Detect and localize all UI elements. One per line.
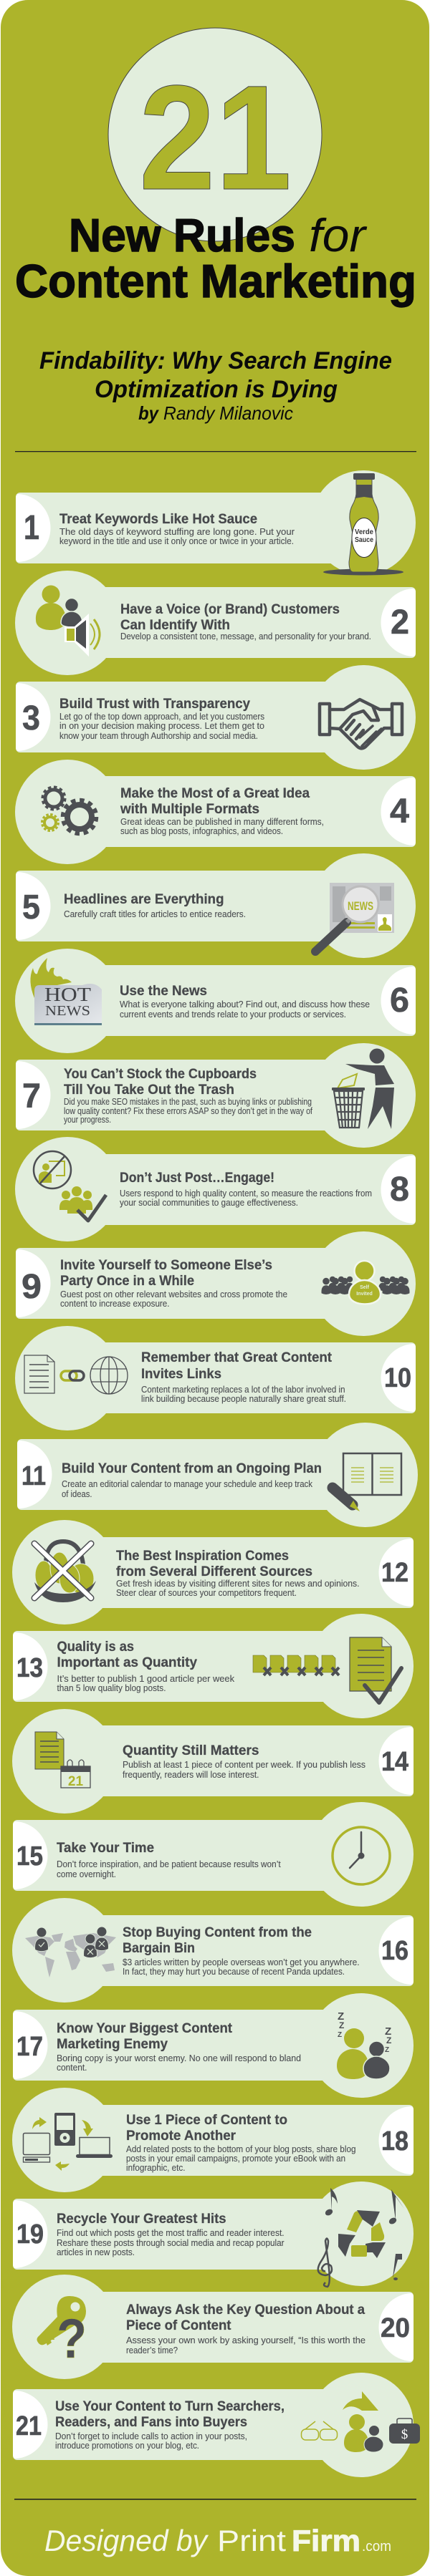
icon: self invited person with crowd: Self: [360, 1285, 370, 1290]
rule 4 text: Great ideas can be published in many different forms,: [120, 816, 324, 827]
rule 18 text: infographic, etc.: [126, 2162, 185, 2173]
footer credit: [44, 2524, 391, 2557]
rule 4 text: [120, 816, 324, 836]
panel shape: [13, 1802, 414, 1907]
rule 10 heading: [141, 1350, 332, 1382]
rule 21 heading: [55, 2398, 285, 2430]
icon: big document with check: [350, 1637, 401, 1703]
rule 1 text: The old days of keyword stuffing are long gone. Put your: [59, 526, 295, 537]
icon: newspaper and magnifier: NEWS: [348, 899, 373, 913]
panel shape: [12, 1898, 414, 2003]
rule 5 heading: Headlines are Everything: [64, 891, 224, 907]
rule 7 text: [64, 1096, 312, 1125]
rule 19 heading: Recycle Your Greatest Hits: [57, 2211, 226, 2227]
rule 3 panel: [16, 665, 416, 770]
footer credit: Firm: [292, 2524, 360, 2557]
rule 2 panel: [15, 571, 416, 675]
rule 10 heading: Invites Links: [141, 1366, 221, 1382]
rule 13 text: than 5 low quality blog posts.: [57, 1682, 166, 1693]
number 21: 21: [16, 2411, 42, 2441]
rule 8 heading: Don’t Just Post…Engage!: [120, 1170, 274, 1186]
icon: money bag: $: [401, 2427, 408, 2442]
icon: glasses: [301, 2421, 337, 2440]
rule 3 text: Let go of the top down approach, and let you customers: [59, 711, 264, 722]
rule 16 heading: Bargain Bin: [123, 1940, 195, 1956]
number 13: 13: [16, 1653, 43, 1683]
number 7: 7: [22, 1078, 41, 1115]
number 4: 4: [390, 793, 409, 831]
rule 16 text: $3 articles written by people overseas won’t get you anywhere.: [123, 1957, 360, 1967]
rule 7 text: your progress.: [64, 1114, 111, 1125]
main title: New Rules: [69, 209, 295, 261]
panel shape: [16, 1231, 416, 1336]
rule 9 text: content to increase exposure.: [60, 1298, 169, 1309]
subtitle: Findability: Why Search Engine: [39, 347, 392, 374]
rule 7 text: low quality content? Fix these errors ASAP so they don’t get in the way of: [64, 1105, 312, 1116]
panel shape: [13, 2182, 414, 2286]
number 19: 19: [16, 2219, 44, 2250]
panel shape: [15, 1326, 416, 1430]
panel shape: [15, 1137, 416, 1241]
big circle badge with 21: [108, 28, 322, 241]
rule 16 heading: Stop Buying Content from the: [123, 1924, 312, 1940]
rule 12 panel: [12, 1520, 414, 1624]
rule 19 text: articles in new posts.: [57, 2247, 135, 2257]
icon: sleeping people: Z: [338, 2010, 344, 2023]
subtitle: Randy Milanovic: [163, 402, 293, 424]
rule 16 panel: [12, 1898, 414, 2003]
rule 4 panel: [15, 760, 416, 864]
panel shape: [13, 1614, 414, 1718]
rule 1 text: keyword in the title and use it only once or twice in your article.: [59, 536, 294, 546]
rule 19 panel: [13, 2182, 414, 2287]
rule 7 heading: Till You Take Out the Trash: [64, 1082, 234, 1098]
number 6: 6: [390, 982, 409, 1020]
rule 2 heading: Can Identify With: [120, 617, 230, 633]
number 9: 9: [22, 1268, 42, 1306]
rule 4 text: such as blog posts, infographics, and videos.: [120, 825, 283, 836]
rule 3 text: [59, 711, 264, 741]
rule 21 text: [55, 2431, 247, 2451]
number 12: 12: [381, 1558, 408, 1588]
rule 17 text: Boring copy is your worst enemy. No one will respond to bland: [57, 2053, 301, 2063]
icon: hot news: [30, 958, 102, 1025]
rule 13 text: [57, 1673, 234, 1693]
number 18: 18: [381, 2126, 408, 2156]
rule 16 heading: [123, 1924, 312, 1956]
rule 20 heading: Always Ask the Key Question About a: [126, 2302, 365, 2318]
rule 14 text: [123, 1759, 366, 1780]
rule 20 text: reader’s time?: [126, 2345, 178, 2355]
number 11: 11: [22, 1461, 46, 1491]
icon: newspaper and magnifier: [315, 883, 394, 952]
rule 6 heading: Use the News: [120, 983, 207, 999]
icon: sleeping people: Z: [338, 2031, 342, 2039]
main title: [15, 209, 416, 307]
rule 7 text: Did you make SEO mistakes in the past, such as buying links or publishing: [64, 1096, 312, 1107]
rule 12 text: Get fresh ideas by visiting different sites for news and opinions.: [116, 1578, 360, 1589]
icon: hot news: HOT: [44, 984, 92, 1005]
rule 9 text: Guest post on other relevant websites and cross promote the: [60, 1289, 287, 1299]
rule 20 text: [126, 2335, 366, 2355]
number 5: 5: [22, 888, 40, 926]
number 3: 3: [22, 699, 40, 737]
number 16: 16: [381, 1936, 408, 1966]
rule 12 heading: The Best Inspiration Comes: [116, 1548, 289, 1564]
rule 20 panel: [12, 2275, 414, 2379]
icon: key and question mark: [37, 2296, 87, 2370]
icon: document and calendar: [35, 1732, 90, 1789]
icon: clock: [333, 1827, 390, 1884]
icon: handshake: [320, 699, 402, 748]
icon: hot sauce bottle: [323, 473, 403, 576]
icon: sleeping people: Z: [339, 2020, 344, 2030]
rule 6 text: current events and trends relate to your products or services.: [120, 1009, 346, 1020]
icon: document, link and globe: [24, 1355, 128, 1394]
subtitle: [39, 347, 392, 424]
panel shape: [13, 1993, 414, 2098]
rule 6 text: [120, 999, 370, 1020]
rule 7 heading: You Can’t Stock the Cupboards: [64, 1066, 257, 1082]
rule 13 heading: [57, 1639, 197, 1670]
number 15: 15: [16, 1841, 43, 1872]
subtitle: Optimization is Dying: [95, 376, 338, 403]
icon: self invited person with crowd: Invited: [356, 1292, 373, 1297]
rule 18 heading: [126, 2112, 287, 2144]
header: [15, 28, 416, 424]
rule 20 heading: [126, 2302, 365, 2333]
rule 17 text: content.: [57, 2062, 87, 2073]
number 10: 10: [384, 1363, 411, 1393]
rule 20 text: Assess your own work by asking yourself, “Is this worth the: [126, 2335, 366, 2345]
number 17: 17: [16, 2032, 43, 2062]
rule 11 text: Create an editorial calendar to manage your schedule and keep track: [62, 1478, 312, 1489]
rule 13 heading: Quality is as: [57, 1639, 134, 1655]
rule 14 panel: [12, 1709, 414, 1814]
rule 2 text: Develop a consistent tone, message, and personality for your brand.: [120, 631, 371, 641]
icon: recycling symbol with music notes: [318, 2188, 404, 2287]
rule 6 text: What is everyone talking about? Find out, and discuss how these: [120, 999, 370, 1009]
rule 2 heading: [120, 601, 340, 633]
rule 21 panel: [13, 2373, 420, 2477]
rule 5 text: Carefully craft titles for articles to entice readers.: [64, 909, 246, 919]
icon: five bad documents: [253, 1655, 339, 1675]
icon: document and calendar: 21: [68, 1774, 83, 1789]
rule 18 panel: [12, 2088, 414, 2192]
panel shape: [15, 571, 416, 675]
rule 11 heading: Build Your Content from an Ongoing Plan: [62, 1461, 322, 1476]
icon: money bag: [389, 2418, 420, 2444]
rule 20 heading: Piece of Content: [126, 2318, 231, 2333]
rule 8 text: your social communities to gauge effectiveness.: [120, 1197, 298, 1208]
rule 12 heading: [116, 1548, 312, 1579]
rule 15 text: come overnight.: [57, 1869, 116, 1879]
icon: key and question mark: ?: [57, 2307, 87, 2370]
panel shape: [16, 470, 416, 575]
rule 21 heading: Use Your Content to Turn Searchers,: [55, 2398, 285, 2414]
number 1: 1: [24, 509, 39, 547]
rule 14 text: Publish at least 1 piece of content per week. If you publish less: [123, 1759, 366, 1770]
rule 8 text: Users respond to high quality content, so measure the reactions from: [120, 1188, 372, 1199]
panel shape: [13, 2373, 414, 2477]
main title: for: [309, 209, 367, 261]
number 20: 20: [381, 2313, 410, 2343]
rule 8 text: [120, 1188, 372, 1208]
rule 12 text: [116, 1578, 360, 1598]
rule 10 text: Content marketing replaces a lot of the labor involved in: [141, 1384, 345, 1395]
number 2: 2: [391, 604, 409, 641]
rule 9 heading: Invite Yourself to Someone Else’s: [60, 1257, 272, 1273]
icon: sleeping people: Z: [385, 2046, 389, 2054]
rule 3 heading: Build Trust with Transparency: [59, 696, 250, 712]
icon: crossed out egg basket: [34, 1541, 96, 1602]
rule 10 heading: Remember that Great Content: [141, 1350, 332, 1365]
rule 8 panel: [15, 1137, 416, 1241]
rule 12 text: Steer clear of sources your competitors frequent.: [116, 1587, 297, 1598]
rule 9 text: [60, 1289, 287, 1309]
icon: hot sauce bottle: Verde: [355, 528, 373, 536]
icon: people with check mark: [59, 1186, 106, 1221]
number 8: 8: [390, 1171, 409, 1209]
icon: gears: [42, 788, 96, 833]
rule 11 text: of ideas.: [62, 1488, 92, 1499]
panel shape: [15, 949, 416, 1053]
footer credit: Designed by: [44, 2524, 209, 2557]
rule 21 text: introduce promotions on your blog, etc.: [55, 2440, 199, 2451]
icon: person throwing trash: [332, 1048, 394, 1129]
rule 14 text: frequently, readers will lose interest.: [123, 1769, 259, 1780]
subtitle: by: [138, 402, 159, 424]
rule 17 heading: [57, 2020, 232, 2052]
rule 15 panel: [13, 1802, 414, 1907]
panel shape: [17, 1423, 418, 1527]
panel shape: [12, 1709, 414, 1814]
rule 6 panel: [15, 949, 416, 1053]
rule 19 text: Find out which posts get the most traffic and reader interest.: [57, 2227, 285, 2238]
rule 16 text: In fact, they may hurt you because of recent Panda updates.: [123, 1966, 345, 1977]
rule 21 heading: Readers, and Fans into Buyers: [55, 2414, 247, 2430]
rule 9 heading: Party Once in a While: [60, 1273, 194, 1289]
rule 11 panel: [17, 1423, 418, 1527]
rule 21 text: Don’t forget to include calls to action in your posts,: [55, 2431, 247, 2441]
icon: no posting sign: [34, 1151, 71, 1188]
rule 3 text: in on your decision making process. Let them get to: [59, 720, 264, 731]
rule 15 text: [57, 1859, 281, 1879]
rule 4 heading: Make the Most of a Great Idea: [120, 785, 310, 801]
rule 13 text: It’s better to publish 1 good article per week: [57, 1673, 234, 1684]
rule 16 text: [123, 1957, 360, 1977]
panel shape: [12, 2275, 414, 2379]
panel shape: [12, 1520, 414, 1624]
rule 1 heading: Treat Keywords Like Hot Sauce: [59, 511, 257, 527]
rule 19 text: [57, 2227, 285, 2257]
rule 7 panel: [16, 1043, 416, 1148]
icon: sleeping people: [337, 2010, 391, 2079]
rule 15 heading: Take Your Time: [57, 1840, 154, 1856]
rule 14 heading: Quantity Still Matters: [123, 1743, 259, 1758]
rule 12 heading: from Several Different Sources: [116, 1564, 312, 1579]
rule 2 heading: Have a Voice (or Brand) Customers: [120, 601, 340, 617]
rule 3 text: know your team through Authorship and social media.: [59, 730, 258, 741]
rule 17 heading: Know Your Biggest Content: [57, 2020, 232, 2036]
rule 13 heading: Important as Quantity: [57, 1655, 197, 1670]
panel shape: [16, 665, 416, 770]
rule 15 text: Don’t force inspiration, and be patient because results won’t: [57, 1859, 281, 1869]
rule 17 text: [57, 2053, 301, 2073]
rule 9 heading: [60, 1257, 272, 1289]
icon: sleeping people: Z: [385, 2025, 391, 2038]
panel shape: [15, 760, 416, 864]
panel shape: [12, 2088, 414, 2192]
rule 4 heading: with Multiple Formats: [120, 801, 259, 817]
rule 1 text: [59, 526, 295, 546]
main title: Content Marketing: [15, 255, 416, 307]
rule 7 heading: [64, 1066, 257, 1098]
rule 10 text: link building because people naturally share great stuff.: [141, 1393, 346, 1404]
rule 18 text: posts in your email campaigns, promote your eBook with an: [126, 2153, 345, 2164]
rule 1 panel: [16, 470, 416, 576]
rule 11 text: [62, 1478, 312, 1499]
rule 10 text: [141, 1384, 346, 1404]
panel shape: [16, 853, 416, 958]
rule 5 panel: [16, 853, 416, 958]
icon: notebook and pen: [333, 1453, 401, 1511]
icon: voice people and speaker: [36, 586, 100, 657]
icon: self invited person with crowd: [321, 1261, 410, 1304]
number 14: 14: [381, 1747, 408, 1777]
big circle badge with 21: 21: [139, 55, 292, 221]
icon: arrow: [343, 2391, 378, 2411]
rule 18 heading: Promote Another: [126, 2128, 236, 2144]
rule 13 panel: [13, 1614, 414, 1718]
icon: world map with people: [25, 1927, 116, 1977]
icon: hot sauce bottle: Sauce: [355, 536, 373, 544]
rule 10 panel: [15, 1326, 416, 1430]
footer credit: Print: [217, 2524, 286, 2557]
footer credit: .com: [362, 2539, 391, 2555]
panel shape: [16, 1043, 416, 1148]
rule 17 panel: [13, 1993, 414, 2098]
rule 4 heading: [120, 785, 310, 817]
rule 17 heading: Marketing Enemy: [57, 2036, 168, 2052]
rule 18 heading: Use 1 Piece of Content to: [126, 2112, 287, 2128]
rule 19 text: Reshare these posts through social media and recap popular: [57, 2237, 285, 2248]
icon: devices sharing content: [23, 2113, 113, 2171]
rule 9 panel: [16, 1231, 416, 1336]
rule 18 text: [126, 2144, 355, 2173]
icon: hot news: NEWS: [45, 1003, 90, 1019]
rule 18 text: Add related posts to the bottom of your blog posts, share blog: [126, 2144, 355, 2154]
icon: sleeping people: Z: [386, 2035, 391, 2045]
icon: reader and buyer: [344, 2414, 383, 2452]
